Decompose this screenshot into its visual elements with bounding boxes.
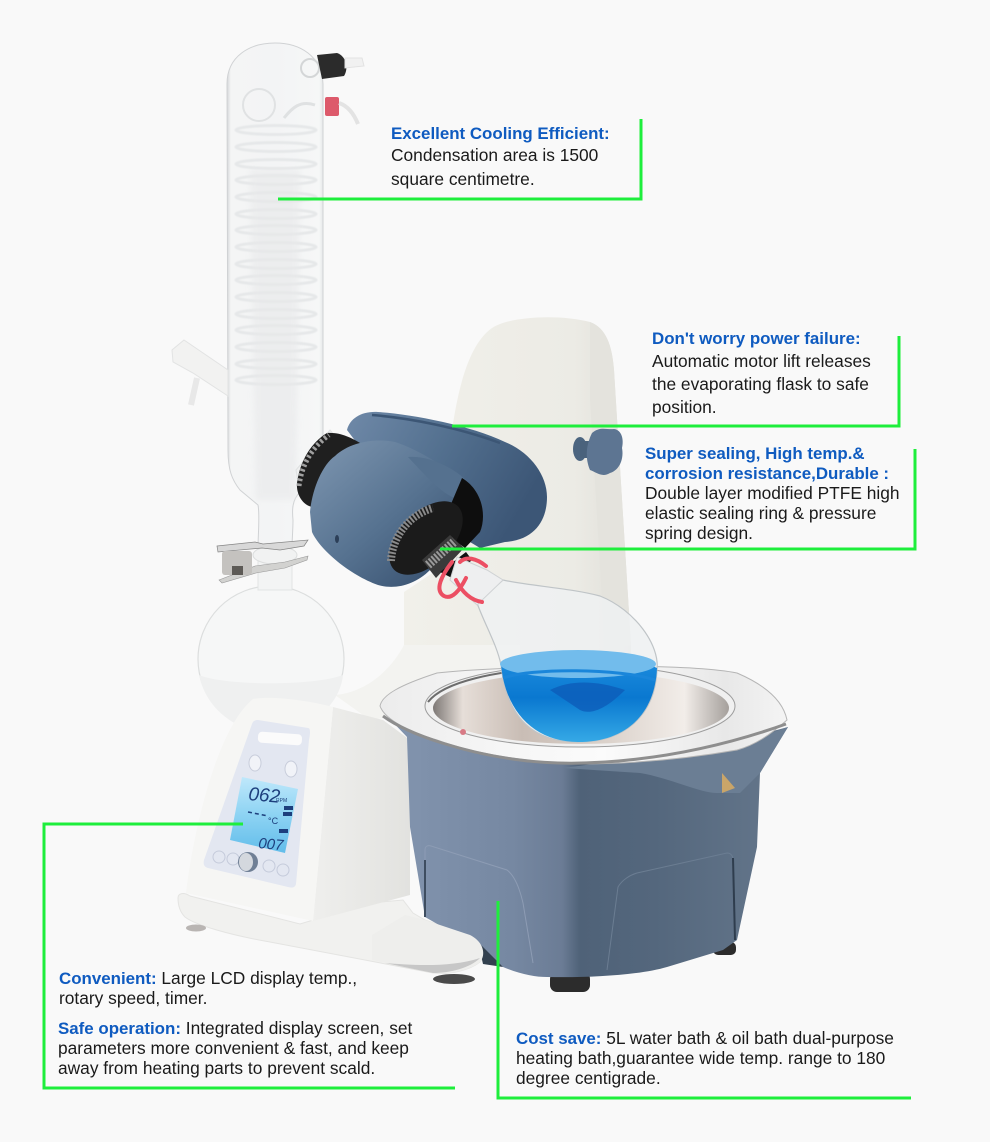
flask neck xyxy=(450,557,503,605)
right access panel xyxy=(607,853,733,970)
control box xyxy=(186,698,410,921)
black hose connector xyxy=(317,53,346,79)
front cylinder xyxy=(310,441,478,587)
callout: convenient and safe operation: away from heating parts to prevent scald. xyxy=(58,1058,375,1078)
red hose connector xyxy=(325,97,339,116)
knurled rear ring xyxy=(297,433,360,507)
cooling coil xyxy=(236,126,316,384)
callout: power failure: Don't worry power failure: xyxy=(652,329,861,348)
adjustment knob xyxy=(573,429,623,475)
steel rim and bowl xyxy=(380,665,787,764)
leader line: cooling xyxy=(278,119,641,199)
LCD screen xyxy=(230,777,298,854)
callout: sealing: spring design. xyxy=(645,523,753,543)
shadow behind coupling xyxy=(440,478,483,548)
tank feet xyxy=(550,942,736,992)
warning triangle xyxy=(722,773,735,793)
callout: power failure: position. xyxy=(652,397,717,417)
rear support pillar xyxy=(335,317,631,720)
leader line: bath xyxy=(498,901,911,1098)
LCD screen: 062 xyxy=(248,784,281,808)
callout: sealing: Double layer modified PTFE high xyxy=(645,483,900,503)
heating bath tank xyxy=(386,715,788,992)
callout: convenient and safe operation xyxy=(44,824,455,1088)
callout: sealing: Super sealing, High temp.& xyxy=(645,444,865,463)
callout: sealing: elastic sealing ring & pressure xyxy=(645,503,876,523)
LCD screen: 007 xyxy=(258,835,285,854)
callout: cost save: degree centigrade. xyxy=(516,1068,661,1088)
glass condenser xyxy=(172,43,364,548)
callout: convenient and safe operation: rotary speed, timer. xyxy=(59,988,207,1008)
spout lip xyxy=(563,727,788,793)
callout: convenient and safe operation: Convenient: Large LCD display temp., xyxy=(59,968,357,988)
callout: cooling: square centimetre. xyxy=(391,169,535,189)
left access panel xyxy=(425,846,533,963)
side arm xyxy=(172,340,228,396)
red joint clip xyxy=(439,559,486,602)
callout: cost save xyxy=(498,901,911,1098)
callout: convenient and safe operation: Safe operation: Integrated display screen, set xyxy=(58,1018,413,1038)
panel buttons and dial xyxy=(213,851,289,876)
metal clamp xyxy=(217,540,308,583)
rotary evaporator illustration xyxy=(172,43,788,992)
LCD screen: °C xyxy=(268,816,279,826)
callout: sealing: corrosion resistance,Durable : xyxy=(645,464,889,483)
housing drain hole xyxy=(335,535,339,543)
callout: power failure xyxy=(452,329,899,426)
callout: cost save: Cost save: 5L water bath & oil bath dual-purpose xyxy=(516,1028,894,1048)
leader line: sealing xyxy=(440,449,915,549)
callout: power failure: the evaporating flask to safe xyxy=(652,374,869,394)
control panel xyxy=(204,720,310,888)
base plate arm in front of tank xyxy=(372,915,503,973)
callout: power failure: Automatic motor lift releases xyxy=(652,351,871,371)
glass receiving flask xyxy=(198,548,344,732)
callout: cooling: Excellent Cooling Efficient: xyxy=(391,124,610,143)
evaporating flask with blue liquid xyxy=(439,557,657,742)
callout: cost save: heating bath,guarantee wide temp. range to 180 xyxy=(516,1048,885,1068)
motor housing xyxy=(297,412,547,588)
leader line: display xyxy=(44,824,455,1088)
callout: cooling xyxy=(278,119,641,199)
knurled coupling xyxy=(376,488,476,588)
callout: convenient and safe operation: parameters more convenient & fast, and keep xyxy=(58,1038,409,1058)
callout: cooling: Condensation area is 1500 xyxy=(391,145,598,165)
base plate xyxy=(178,894,483,984)
callout: sealing xyxy=(440,444,915,549)
LCD screen: RPM xyxy=(276,798,287,804)
leader line: power failure xyxy=(452,336,899,426)
